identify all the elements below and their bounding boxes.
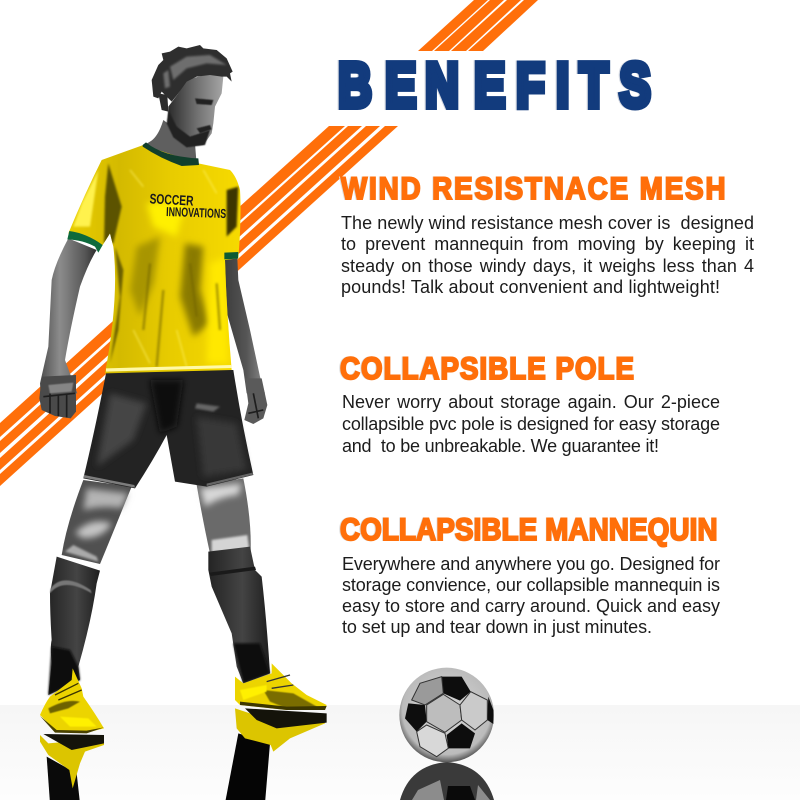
jersey logo: SOCCER [149,190,194,209]
left arm [40,238,97,393]
heading: COLLAPSIBLE POLE [340,351,634,386]
heading: COLLAPSIBLE MANNEQUIN [339,512,717,547]
left sleeve cuff [67,231,103,253]
heading: COLLAPSIBLE POLE [339,351,634,386]
body text: storage convience, our collapsible mannequin is [342,575,720,595]
player lower body [40,370,327,800]
title: BENEFITS [337,50,649,120]
eyes and mouth [195,98,213,133]
player upper body [39,45,267,424]
body text [342,554,720,637]
body text: The newly wind resistance mesh cover is designed [341,213,754,233]
jersey logo [149,190,227,221]
left sock [48,557,100,695]
body text: pounds! Talk about convenient and lightweight! [341,277,720,297]
soccer ball [399,668,494,762]
beard [167,110,210,147]
right hand [244,378,267,424]
left shoe reflection [40,734,104,800]
body text: Everywhere and anywhere you go. Designed for [342,554,720,574]
ear [158,93,168,112]
right arm [224,258,265,393]
right shoe [235,663,327,710]
section: collapsible mannequin [339,512,720,637]
player [39,45,327,800]
body text [341,213,754,297]
neck [143,120,197,165]
heading: COLLAPSIBLE MANNEQUIN [340,512,718,547]
heading: WIND RESISTNACE MESH [341,171,726,206]
left hand [39,375,76,418]
right sleeve cuff [224,252,238,259]
jersey logo: INNOVATIONS [166,204,227,221]
floor [0,705,800,800]
body text: to prevent mannequin from moving by keeping it [341,234,754,254]
body text: to set up and tear down in just minutes. [342,617,652,637]
body text: steady on those windy days, it weighs less than 4 [341,256,754,276]
face [168,73,223,147]
left knee and leg [62,480,132,564]
right shoe reflection [225,708,327,800]
ball reflection [400,762,494,800]
left shoe [40,668,104,733]
hair [152,45,233,102]
heading: WIND RESISTNACE MESH [340,171,725,206]
section: wind resistance mesh [340,171,754,297]
body text: and to be unbreakable. We guarantee it! [342,436,659,456]
right knee and leg [197,478,251,553]
top orange stripes [418,0,538,51]
body text: Never worry about storage again. Our 2-piece [342,392,720,412]
title: BENEFITS [338,50,651,120]
section: collapsible pole [339,351,720,456]
head [152,45,233,147]
jersey [67,142,241,373]
middle orange stripes [0,126,398,486]
body text [342,392,720,456]
shorts [83,370,253,488]
jersey collar [143,142,199,166]
body text: collapsible pvc pole is designed for easy storage [342,414,720,434]
right sock [208,547,270,683]
body text: easy to store and carry around. Quick and easy [342,596,720,616]
ball panels [405,677,493,748]
